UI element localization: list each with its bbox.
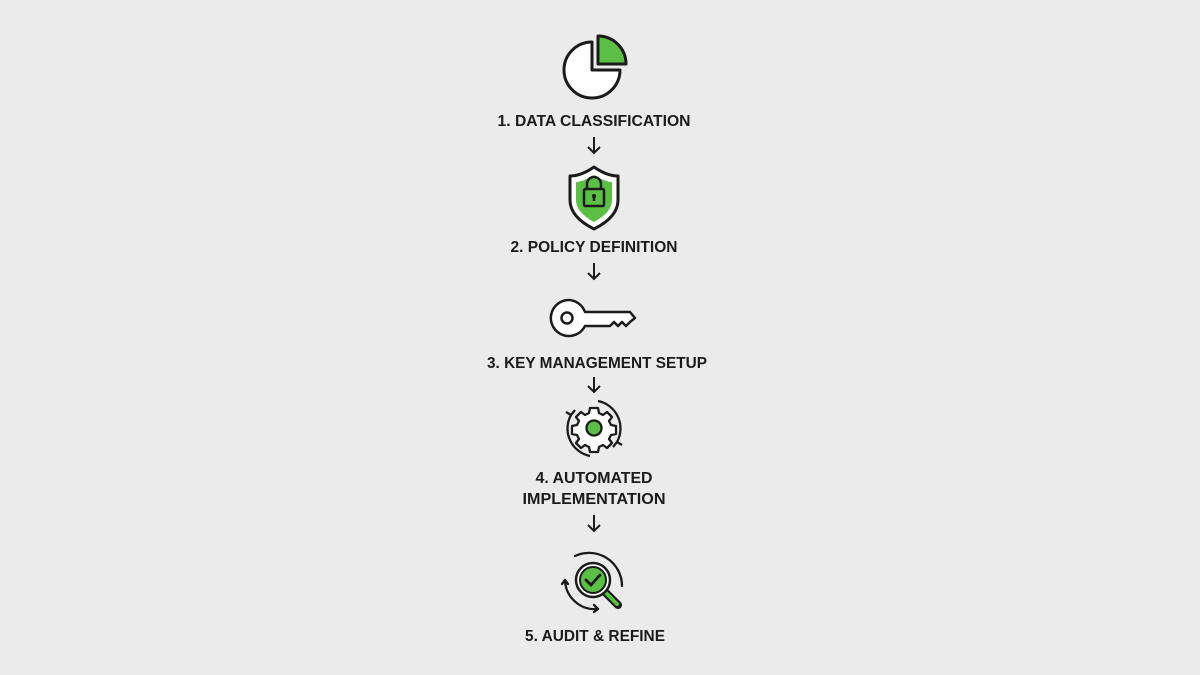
icon: gear cycle: [566, 401, 622, 456]
icon: audit magnifier: [562, 553, 622, 612]
heading: step 2: 2. POLICY DEFINITION: [510, 239, 678, 256]
icon: pie chart: [564, 36, 626, 98]
heading: step 3: 3. KEY MANAGEMENT SETUP: [487, 355, 707, 372]
heading: step 4: [522, 470, 666, 508]
heading: step 1: 1. DATA CLASSIFICATION: [498, 113, 690, 130]
heading: step 5: 5. AUDIT & REFINE: [525, 628, 665, 645]
arrow 4: [588, 515, 600, 531]
heading: step 4: IMPLEMENTATION: [522, 491, 666, 508]
arrow 3: [588, 377, 600, 392]
icon: shield lock: [570, 167, 618, 229]
arrow 2: [588, 263, 600, 279]
icon: key: [551, 300, 635, 336]
heading: step 4: 4. AUTOMATED: [536, 470, 652, 487]
arrow 1: [588, 137, 600, 153]
